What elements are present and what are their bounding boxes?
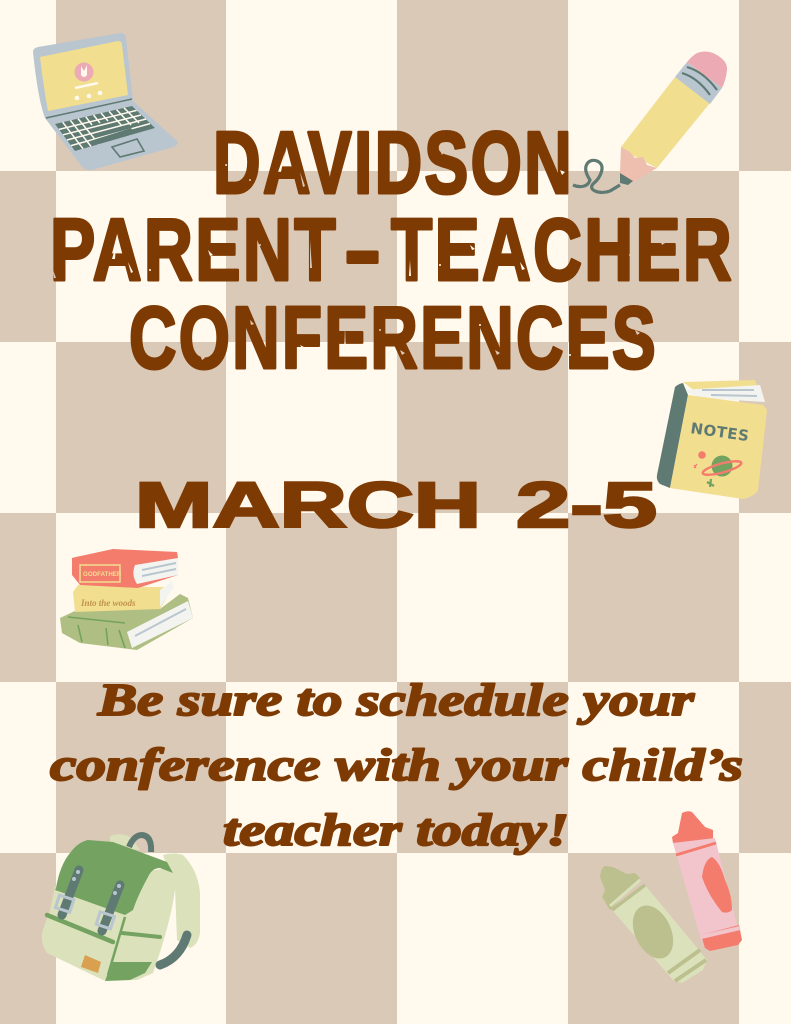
title line: Parent-Teacher: PARENT: [50, 200, 338, 299]
body text: [50, 675, 743, 855]
title line: Davidson: DAVIDSON: [213, 113, 574, 212]
date: 2-5: [516, 469, 657, 541]
green crayon: [600, 866, 707, 983]
icon: book stack: Into the woods: [80, 598, 136, 608]
icon: backpack: [42, 834, 200, 981]
icon: book stack: GODFATHER: [83, 571, 122, 578]
icon: book stack: [60, 549, 193, 650]
title: [53, 130, 732, 370]
red crayon: [672, 811, 742, 951]
title line: Parent-Teacher: -: [344, 200, 385, 299]
body line 3: teacher today!: [223, 805, 569, 855]
icon: crayons: [600, 811, 742, 983]
body line 2: conference with your child’s: [50, 740, 743, 790]
icon: notes book: NOTES: [689, 419, 750, 445]
icon: laptop: [33, 33, 178, 170]
body line 1: Be sure to schedule your: [97, 675, 695, 725]
icon: notes book: [657, 380, 767, 499]
icon: pencil: [573, 52, 727, 192]
date: MARCH: [135, 469, 481, 541]
